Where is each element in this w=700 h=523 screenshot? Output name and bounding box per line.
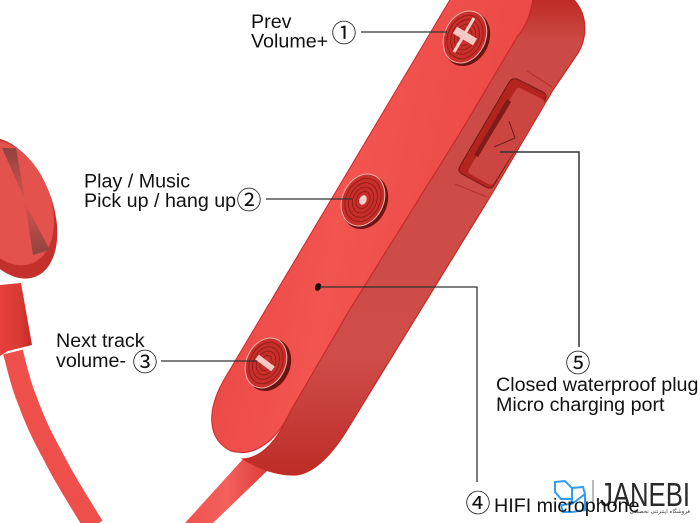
- label 4: ④: [465, 484, 491, 520]
- earphone stem: [0, 283, 32, 356]
- panel: control unit face: [212, 0, 533, 453]
- label 1: Prev: [251, 11, 292, 33]
- microphone hole: [314, 282, 322, 292]
- lower cable to control unit: [185, 459, 268, 523]
- label 3: [56, 330, 158, 379]
- earphone head: [0, 123, 77, 293]
- icon: blue cubes: [555, 481, 585, 512]
- label 3: volume-: [56, 350, 126, 372]
- leader line 1: [361, 31, 447, 33]
- leader line 2: [266, 198, 352, 200]
- leader line 5: [500, 152, 579, 347]
- label 1: ①: [331, 14, 357, 50]
- button 1: [435, 4, 499, 74]
- label 5: ⑤: [565, 344, 591, 380]
- leader line 4: [320, 287, 477, 482]
- label 1: [251, 11, 357, 52]
- label 2: Pick up / hang up: [84, 190, 236, 212]
- logo tagline: فروشگاه اینترنتی تخصصی: [630, 508, 690, 515]
- control unit: [212, 0, 585, 475]
- left cable: [13, 352, 94, 523]
- label 2: ②: [236, 181, 262, 217]
- panel: control unit side: [243, 0, 585, 475]
- label 5: [496, 344, 698, 416]
- label 3: Next track: [56, 330, 145, 352]
- label 4: [465, 484, 640, 520]
- label 5: Closed waterproof plug: [496, 374, 698, 396]
- label 5: Micro charging port: [496, 394, 665, 416]
- label 3: ③: [132, 343, 158, 379]
- button 2: [333, 167, 397, 237]
- label 2: Play / Music: [84, 170, 190, 192]
- watermark logo: [555, 476, 690, 515]
- logo divider: [592, 480, 594, 510]
- label 4: HIFI microphone: [494, 495, 640, 517]
- label 2: [84, 170, 262, 217]
- waterproof plug: [459, 79, 546, 188]
- label 1: Volume+: [251, 30, 328, 52]
- side ridge marks: [455, 71, 552, 197]
- button 3: [237, 331, 299, 398]
- leader line 3: [161, 360, 257, 362]
